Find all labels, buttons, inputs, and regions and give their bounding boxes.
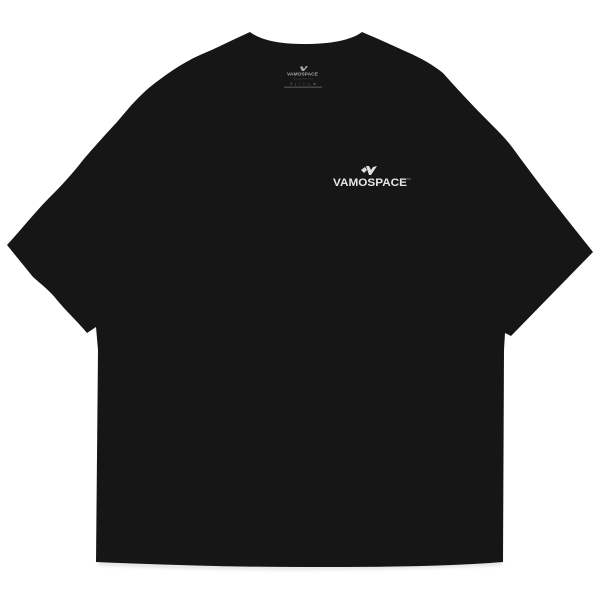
logo wordmark: VAMOSPACE [333,177,407,189]
icon: label symbol [300,66,308,71]
chest logo [333,166,411,189]
label size and care row: S | ○ □ △ ⊗ [290,82,316,86]
neck label [284,66,322,88]
icon: logo symbol [361,166,377,175]
hem shadow [98,561,502,570]
label tagline: 100% Cotton Oversize Tshirt [293,78,313,80]
label fine print [284,86,322,88]
trademark mark: TM [407,178,411,181]
label brand name: VAMOSPACE [287,72,318,76]
